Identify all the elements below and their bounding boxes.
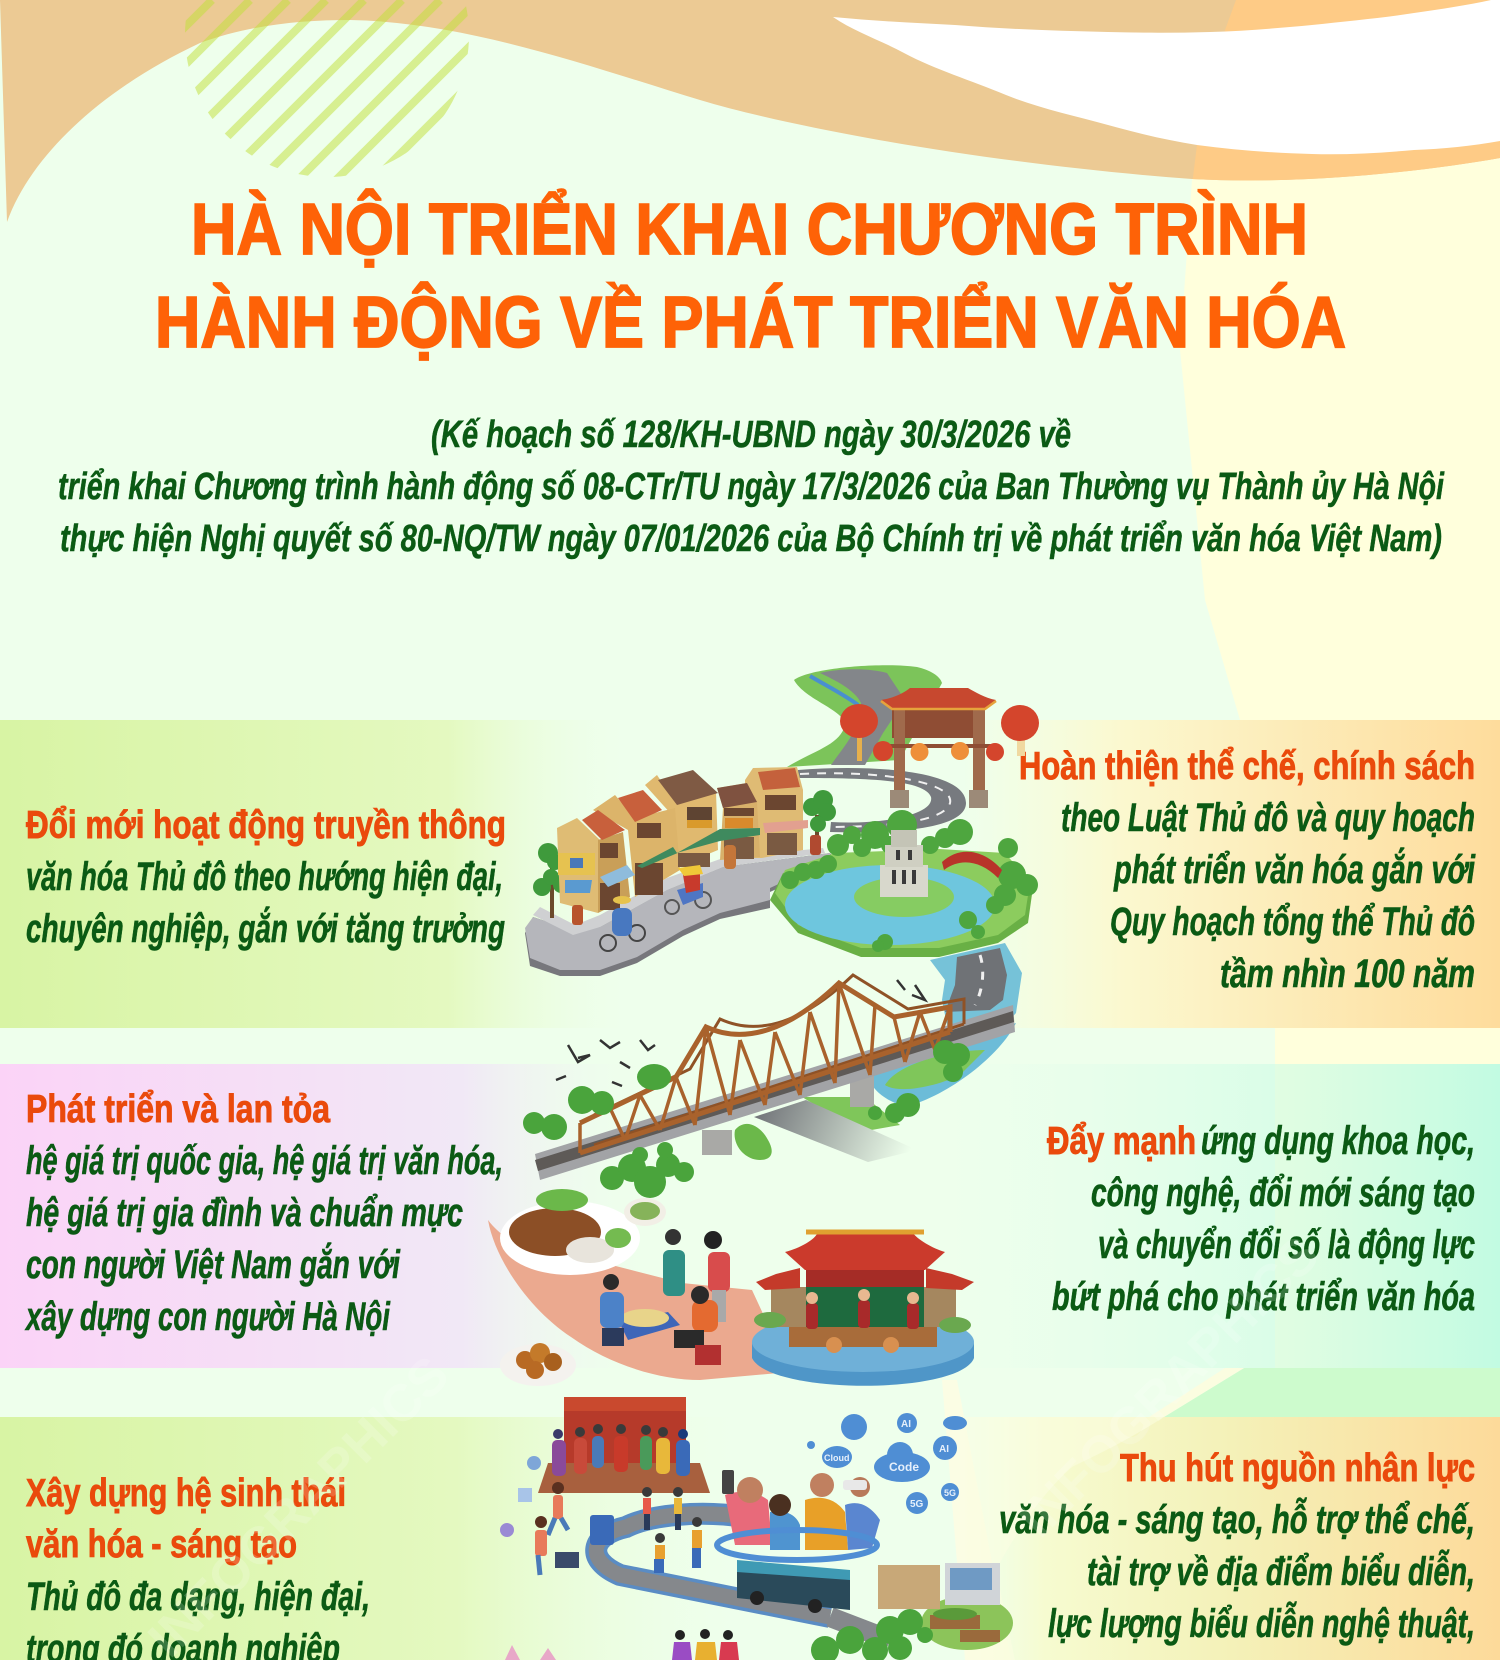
icon labels: AI: [901, 1419, 911, 1430]
red bridge: [942, 852, 1002, 878]
watermark: INFOGRAPHICS: [1007, 1226, 1330, 1548]
street trees: [533, 790, 836, 918]
illustration: Hoan Kiem lake with turtle tower: [770, 810, 1038, 1040]
illustration: cheo stage: [538, 1397, 710, 1493]
panel text: [26, 804, 506, 951]
far truss: [594, 975, 964, 1145]
subtitle: [58, 414, 1445, 560]
tower: [880, 830, 928, 897]
trees and women: [811, 1609, 933, 1660]
panel text: chuyên nghiệp, gắn với tăng trưởng: [26, 905, 505, 951]
icon labels: Cloud: [824, 1453, 850, 1463]
gate: [881, 688, 996, 808]
plate of cakes: [500, 1343, 576, 1386]
library and garden: [878, 1563, 1013, 1650]
panel: thể chế: [960, 720, 1500, 1028]
panel text: Xây dựng hệ sinh thái: [26, 1472, 346, 1515]
road: [596, 1514, 830, 1617]
lanterns: [840, 704, 1039, 761]
tech icons: [500, 1413, 967, 1537]
panel text: [999, 1447, 1475, 1646]
birds: [556, 980, 925, 1086]
icon labels: [824, 1419, 956, 1510]
panel: truyền thông: [0, 720, 640, 1028]
subtitle: (Kế hoạch số 128/KH-UBND ngày 30/3/2026 về: [431, 414, 1071, 456]
panel text: [26, 1472, 370, 1660]
dancers: [535, 1482, 702, 1575]
panel: giá trị: [0, 1064, 660, 1368]
panel text: Đổi mới hoạt động truyền thông: [26, 804, 506, 847]
watermark: [137, 1226, 1330, 1660]
illustration: Long Bien bridge: [523, 975, 1016, 1198]
bridge trees: [523, 1040, 970, 1198]
illustration: digital culture: [500, 1413, 1013, 1660]
performers: [552, 1424, 690, 1476]
panel: nhân lực: [965, 1417, 1500, 1660]
top decorative tan wave: [0, 0, 1500, 222]
awnings: [565, 880, 592, 893]
buildings: [557, 767, 808, 913]
family figures: [600, 1229, 730, 1365]
illustration: gate and road: [787, 665, 1039, 832]
truss: [580, 983, 950, 1153]
lotus: [754, 1312, 971, 1333]
icon labels: AI: [939, 1444, 949, 1455]
panel text: [1019, 745, 1476, 996]
illustration: water puppet stage: [752, 1232, 974, 1386]
panel: khoa học công nghệ: [940, 1064, 1500, 1368]
illustration: family meal: [488, 1189, 790, 1386]
panel text: Đẩy mạnh: [1047, 1120, 1196, 1163]
panel text: xây dựng con người Hà Nội: [25, 1295, 391, 1339]
watermark: INFOGRAPHICS: [137, 1346, 460, 1660]
icon labels: 5G: [910, 1499, 924, 1510]
panel text: hệ giá trị gia đình và chuẩn mực: [26, 1191, 463, 1235]
icon labels: Code: [889, 1460, 919, 1474]
title: [155, 189, 1346, 363]
panel text: Phát triển và lan tỏa: [26, 1088, 330, 1131]
icon labels: 5G: [944, 1488, 956, 1498]
group with VR: [717, 1470, 880, 1560]
title: HÀ NỘI TRIỂN KHAI CHƯƠNG TRÌNH: [191, 189, 1308, 270]
bus: [737, 1560, 850, 1613]
panel: hệ sinh thái: [0, 1417, 760, 1660]
puppets: [806, 1289, 919, 1353]
panel text: [25, 1088, 503, 1339]
illustration: old quarter street: [525, 767, 836, 976]
panel text: văn hóa Thủ đô theo hướng hiện đại,: [26, 855, 503, 899]
lake trees: [781, 810, 1038, 952]
title: HÀNH ĐỘNG VỀ PHÁT TRIỂN VĂN HÓA: [155, 282, 1346, 363]
panel text: văn hóa - sáng tạo: [26, 1523, 297, 1566]
hatched circle decoration: [185, 0, 469, 177]
panel text: con người Việt Nam gắn với: [26, 1241, 401, 1287]
panel text: hệ giá trị quốc gia, hệ giá trị văn hóa,: [26, 1139, 503, 1183]
panel text: Thủ đô đa dạng, hiện đại,: [26, 1575, 370, 1619]
cyclist and cyclo: [572, 835, 821, 951]
lotus bud: [505, 1645, 556, 1660]
panel text: [1047, 1119, 1475, 1319]
